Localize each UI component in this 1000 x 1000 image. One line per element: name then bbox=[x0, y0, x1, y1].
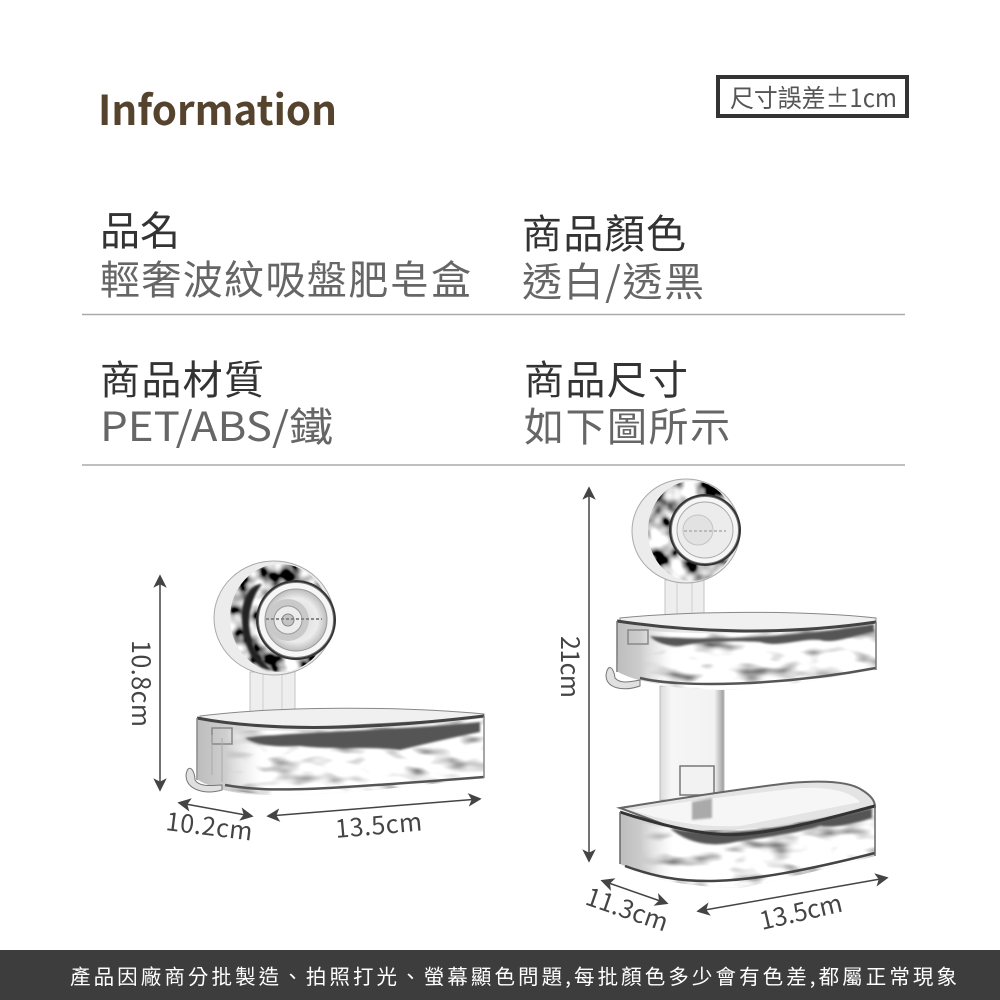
title: Information bbox=[98, 77, 337, 137]
spec: product colour: 透白/透黑 bbox=[522, 250, 704, 308]
footer notice bar: 產品因廠商分批製造、拍照打光、螢幕顯色問題,每批顏色多少會有色差,都屬正常現象 bbox=[70, 960, 957, 990]
lower tray bbox=[620, 766, 875, 888]
spec: product size: 如下圖所示 bbox=[524, 395, 730, 453]
spec: product material bbox=[100, 348, 333, 453]
spec: product size bbox=[524, 348, 730, 453]
dimension: width 13.5cm: 13.5cm bbox=[756, 884, 846, 938]
dimension: height 10.8cm: 10.8cm bbox=[124, 640, 160, 727]
dimension: width 13.5cm: 13.5cm bbox=[334, 803, 423, 846]
spec: product name: 輕奢波紋吸盤肥皂盒 bbox=[100, 248, 471, 306]
upper tray bbox=[606, 612, 876, 690]
post bbox=[660, 686, 724, 800]
dimension: width 13.5cm bbox=[699, 878, 886, 938]
spec: product colour: 商品顏色 bbox=[522, 202, 686, 260]
upper stem bbox=[665, 580, 704, 616]
suction cup bbox=[214, 561, 336, 675]
stem bbox=[250, 672, 295, 714]
tolerance badge: 尺寸誤差±1cm bbox=[730, 79, 897, 115]
spec: product name bbox=[100, 199, 471, 306]
product: single-tier soap dish bbox=[186, 561, 484, 795]
dimension: depth 11.3cm: 11.3cm bbox=[581, 878, 673, 939]
spec: product material: 商品材質 bbox=[100, 348, 264, 406]
dimension: height 21cm: 21cm bbox=[553, 636, 589, 698]
footer notice bar bbox=[0, 950, 1000, 1000]
spec: product name: 品名 bbox=[100, 199, 180, 257]
dimension: width 13.5cm bbox=[269, 799, 479, 846]
spec: product material: PET/ABS/鐵 bbox=[100, 395, 333, 453]
dimension: depth 10.2cm: 10.2cm bbox=[164, 802, 255, 849]
suction cup bbox=[632, 479, 741, 583]
spec: product colour bbox=[522, 202, 704, 308]
tray bbox=[186, 708, 484, 795]
spec: product size: 商品尺寸 bbox=[524, 348, 688, 406]
product: two-tier soap dish bbox=[606, 479, 876, 888]
